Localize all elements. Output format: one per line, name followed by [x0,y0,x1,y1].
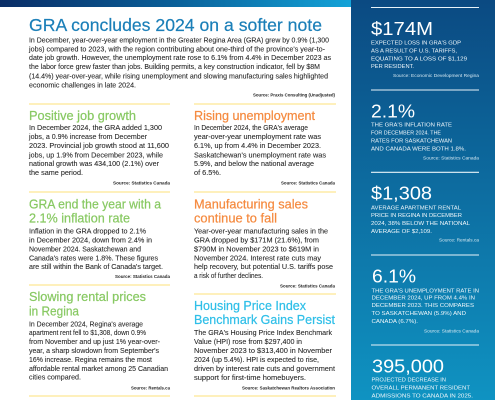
stat: 2.1%: AND CANADA WERE BOTH 1.8%. [371,146,466,152]
panel: positive job growth: jobs, a 0.9% increase from December [28,132,147,141]
stat: 2.1%: 2.1% [371,100,415,121]
panel: slowing rental prices: affordable rental market among 25 Canadian [29,364,168,373]
panel: housing price index: Benchmark Gains Persist [194,312,335,327]
stat: $1,308: Source: Rentals.ca [439,238,480,243]
panel: inflation rate: 2.1% inflation rate [29,210,130,226]
panel: housing price index [194,298,336,390]
panel: rising unemployment: of 6.5%. [194,168,221,177]
panel: slowing rental prices: 16% increase. Regina remains the most [29,355,153,364]
panel: manufacturing sales: $790M in November 2023 to $619M in [194,244,319,254]
panel: housing price index: 2024 (up 5.4%). HPI is expected to rise, [194,355,319,364]
panel: inflation rate: Source: Statistics Canada [115,274,170,279]
panel: inflation rate: Canada's rates were 1.8%. These figures [29,253,158,262]
stat: 6.1%: THE GRA'S UNEMPLOYMENT RATE IN [372,288,479,294]
panel: manufacturing sales: Manufacturing sales [194,196,308,212]
panel: rising unemployment [194,108,335,186]
top gradient bar [0,0,351,7]
panel: positive job growth [28,108,170,186]
stat: 2.1%: Source: Statistics Canada [423,155,480,160]
title: GRA concludes 2024 on a softer note [29,15,322,35]
stat: 395,000: 395,000 [372,355,444,376]
stat: $1,308: PRICE IN REGINA IN DECEMBER [371,213,462,219]
stat: 6.1% [372,265,480,333]
stat: $174M: PER RESIDENT. [371,64,414,70]
panel: manufacturing sales: help recovery, but potential U.S. tariffs pose [194,262,333,271]
stat: $1,308 [371,182,480,243]
stat: $174M: AS A RESULT OF U.S. TARIFFS, [371,48,458,54]
panel: rising unemployment: Rising unemployment [194,108,315,123]
panel: housing price index: Source: Saskatchewan Realtors Association [242,386,335,390]
stat: $1,308: AVERAGE APARTMENT RENTAL [371,205,461,211]
intro text block: jobs) compared to 2023, with the region contributing about one-third of the province's year-to- [28,44,325,54]
stat: $1,308: 2024, 38% BELOW THE NATIONAL [371,221,470,227]
stat: 395,000 [372,355,473,399]
stat: 395,000: ADMISSIONS TO CANADA IN 2025. [372,393,473,399]
stat: $174M: EXPECTED LOSS IN GRA'S GDP [371,40,461,46]
stat: 395,000: OVERALL PERMANENT RESIDENT [372,385,471,391]
panel: slowing rental prices: In December 2024, Regina's average [29,320,143,328]
panel: rising unemployment: year-over-year unemployment rate was [194,132,321,141]
panel: inflation rate: in December 2024, down from 2.4% in [29,236,152,244]
stat: 2.1%: FOR DECEMBER 2024. THE [371,130,441,136]
intro text block: In December, year-over-year employment in the Greater Regina Area (GRA) grew by 0.9% (1,300 [29,36,329,44]
stat: 395,000: PROJECTED DECREASE IN [372,377,446,383]
panel: slowing rental prices: in Regina [29,304,80,318]
stat: 2.1%: RATES FOR SASKATCHEWAN [371,138,452,144]
right sidebar background [351,0,495,400]
panel: manufacturing sales: Year-over-year manufacturing sales in the [194,226,328,236]
panel: rising unemployment: 5.9%, and below the national average [194,159,314,168]
panel: manufacturing sales: November 2024. Interest rate cuts may [194,253,321,262]
panel: inflation rate: November 2024. Saskatchewan and [29,244,141,254]
stat: 6.1%: DECEMBER 2023. THIS COMPARES [372,303,474,309]
stat: $174M: $174M [371,18,433,39]
panel: housing price index: November 2023 to $313,400 in November [194,346,332,355]
stat: $174M [371,18,480,78]
panel: manufacturing sales [194,196,335,288]
stat: 6.1%: Source: Statistics Canada [424,328,480,333]
panel: housing price index: driven by interest rate cuts and government [194,364,336,373]
intro text block: economic challenges in late 2024. [29,80,136,90]
panel: positive job growth: 2023. Provincial job growth stood at 11,600 [29,141,169,150]
panel: rising unemployment: Source: Statistics Canada [281,180,335,186]
panel: slowing rental prices: Slowing rental prices [29,289,146,304]
panel: manufacturing sales: continue to fall [194,210,277,226]
panel: slowing rental prices: year, a sharp slowdown from September's [29,346,159,355]
stat: 6.1%: DECEMBER 2024, UP FROM 4.4% IN [372,296,475,302]
panel: positive job growth: In December 2024, the GRA added 1,300 [29,123,162,132]
panel: housing price index: Housing Price Index [194,298,306,313]
panel: housing price index: support for first-time homebuyers. [194,373,306,382]
panel: slowing rental prices [29,289,170,390]
panel: positive job growth: Positive job growth [29,108,136,123]
panel: positive job growth: national growth was 434,100 (2.1%) over [29,159,159,168]
panel: housing price index: Value (HPI) rose from $297,400 in [194,337,302,346]
panel: inflation rate [29,196,170,279]
intro source: Source: Praxis Consulting (Unadjusted) [253,92,335,98]
intro text block [28,36,331,90]
panel: inflation rate: GRA end the year with a [29,196,162,212]
intro text block: date job growth. However, the unemployment rate rose to 6.1% from 4.4% in December 2023 as [29,53,331,62]
stat: 6.1%: CANADA (6.7%). [372,319,418,325]
panel: positive job growth: the same period. [29,168,83,177]
panel: manufacturing sales: GRA dropped by $171M (21.6%), from [194,236,319,244]
panel: housing price index: The GRA's Housing Price Index Benchmark [194,328,332,337]
stat: 6.1%: TO SASKATCHEWAN (5.9%) AND [372,311,466,317]
stat: 2.1% [371,100,480,160]
stat: 2.1%: THE GRA'S INFLATION RATE [371,122,452,128]
stat: $1,308: AVERAGE OF $2,109. [371,229,432,235]
intro text block: the labor force grew faster than jobs. Building permits, a key construction indicator, fell by $8M [29,62,320,71]
panel: rising unemployment: In December 2024, the GRA's average [194,123,308,132]
panel: slowing rental prices: Source: Rentals.ca [131,386,170,390]
panel: positive job growth: jobs, up 1.9% from December 2023, while [28,150,163,159]
panel: positive job growth: Source: Statistics Canada [113,180,170,186]
stat: 6.1%: 6.1% [372,265,416,286]
panel: slowing rental prices: apartment rent fell to $1,308, down 0.9% [29,328,146,337]
panel: rising unemployment: Saskatchewan's unemployment rate was [194,150,326,159]
panel: inflation rate: Inflation in the GRA dropped to 2.1% [29,226,146,236]
panel: inflation rate: are still within the Bank of Canada's target. [29,262,163,271]
intro text block: (14.4%) year-over-year, while rising unemployment and slowing manufacturing sales highlighted [29,72,328,80]
stat: $1,308: $1,308 [371,182,432,203]
panel: slowing rental prices: cities compared. [29,372,81,382]
panel: slowing rental prices: from November and up just 1% year-over- [29,337,160,346]
stat: $174M: Source: Economic Development Regina [393,73,480,78]
panel: rising unemployment: 6.1%, up from 4.4% in December 2023. [194,141,321,150]
panel: manufacturing sales: Source: Statistics Canada [280,284,335,288]
panel: manufacturing sales: a risk of further declines. [194,271,263,280]
stat: $174M: EQUATING TO A LOSS OF $1,129 [371,56,467,62]
